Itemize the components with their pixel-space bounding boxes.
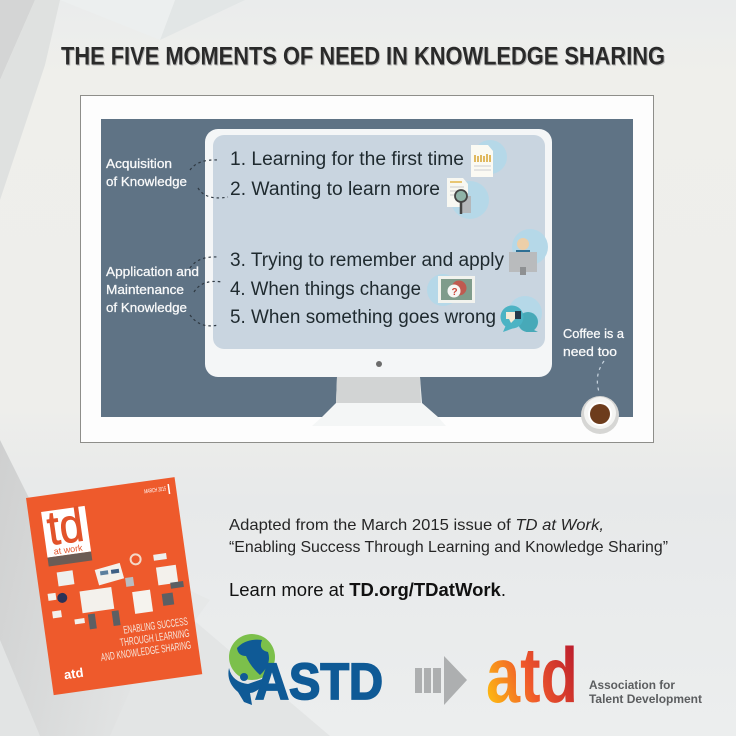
blue wall panel xyxy=(101,119,633,417)
icon: thumbs-down speech bubbles xyxy=(500,296,542,332)
monitor xyxy=(205,129,552,377)
source text xyxy=(229,517,668,556)
label: application and maintenance of knowledge xyxy=(106,265,199,315)
list of five moments: 3. Trying to remember and apply xyxy=(230,250,504,271)
ATD logo: Talent Development xyxy=(589,692,702,706)
issue date: MARCH 2015 xyxy=(144,486,167,495)
cover title xyxy=(97,616,192,664)
panel: framed illustration xyxy=(80,96,654,442)
label: acquisition of knowledge: of Knowledge xyxy=(106,175,187,189)
td logo: td xyxy=(44,499,87,556)
ATD logo: atd xyxy=(486,631,578,719)
list of five moments: 1. Learning for the first time xyxy=(230,149,464,170)
arrow: rebrand xyxy=(415,656,467,705)
issue date xyxy=(144,484,170,497)
icon: person at laptop xyxy=(509,229,548,275)
title: THE FIVE MOMENTS OF NEED IN KNOWLEDGE SHARING xyxy=(62,44,666,72)
ASTD logo: ASTD xyxy=(255,653,383,710)
icon: magnifier on document xyxy=(447,178,489,219)
list of five moments: 4. When things change xyxy=(230,279,421,300)
label: acquisition of knowledge xyxy=(106,157,187,189)
list of five moments xyxy=(230,149,504,328)
ASTD logo xyxy=(228,634,383,710)
cover title: THROUGH LEARNING xyxy=(119,628,190,649)
cover title: ENABLING SUCCESS xyxy=(123,616,189,637)
icon: tablet with question bubble xyxy=(427,274,475,306)
label: application and maintenance of knowledge: Maintenance xyxy=(106,283,184,297)
list of five moments: 5. When something goes wrong xyxy=(230,307,496,328)
list of five moments: 2. Wanting to learn more xyxy=(230,179,440,200)
icon: document with chart xyxy=(471,140,507,177)
label: acquisition of knowledge: Acquisition xyxy=(106,157,172,171)
learn more text: Learn more at TD.org/TDatWork. xyxy=(229,580,506,600)
title: THE FIVE MOMENTS OF NEED IN KNOWLEDGE SHARING xyxy=(61,42,665,70)
callout: coffee is a need too xyxy=(563,327,624,392)
callout: coffee is a need too: Coffee is a xyxy=(563,327,624,341)
cover title: AND KNOWLEDGE SHARING xyxy=(100,640,192,664)
ATD logo xyxy=(486,631,702,719)
monitor stand xyxy=(312,377,446,426)
source text: Adapted from the March 2015 issue of TD at Work, xyxy=(229,517,604,534)
cover atd logo: atd xyxy=(63,665,84,682)
magazine cover xyxy=(26,477,202,695)
callout: coffee is a need too: need too xyxy=(563,345,617,359)
td logo: at work xyxy=(53,543,84,557)
ATD logo: Association for xyxy=(589,678,675,692)
label: application and maintenance of knowledge: Application and xyxy=(106,265,199,279)
icon: tablet with question bubble: ? xyxy=(452,287,458,298)
icon: coffee cup xyxy=(581,396,619,434)
dotted connectors xyxy=(190,160,228,326)
source text: “Enabling Success Through Learning and Knowledge Sharing” xyxy=(229,539,668,556)
cover illustration xyxy=(44,548,188,635)
label: application and maintenance of knowledge: of Knowledge xyxy=(106,301,187,315)
